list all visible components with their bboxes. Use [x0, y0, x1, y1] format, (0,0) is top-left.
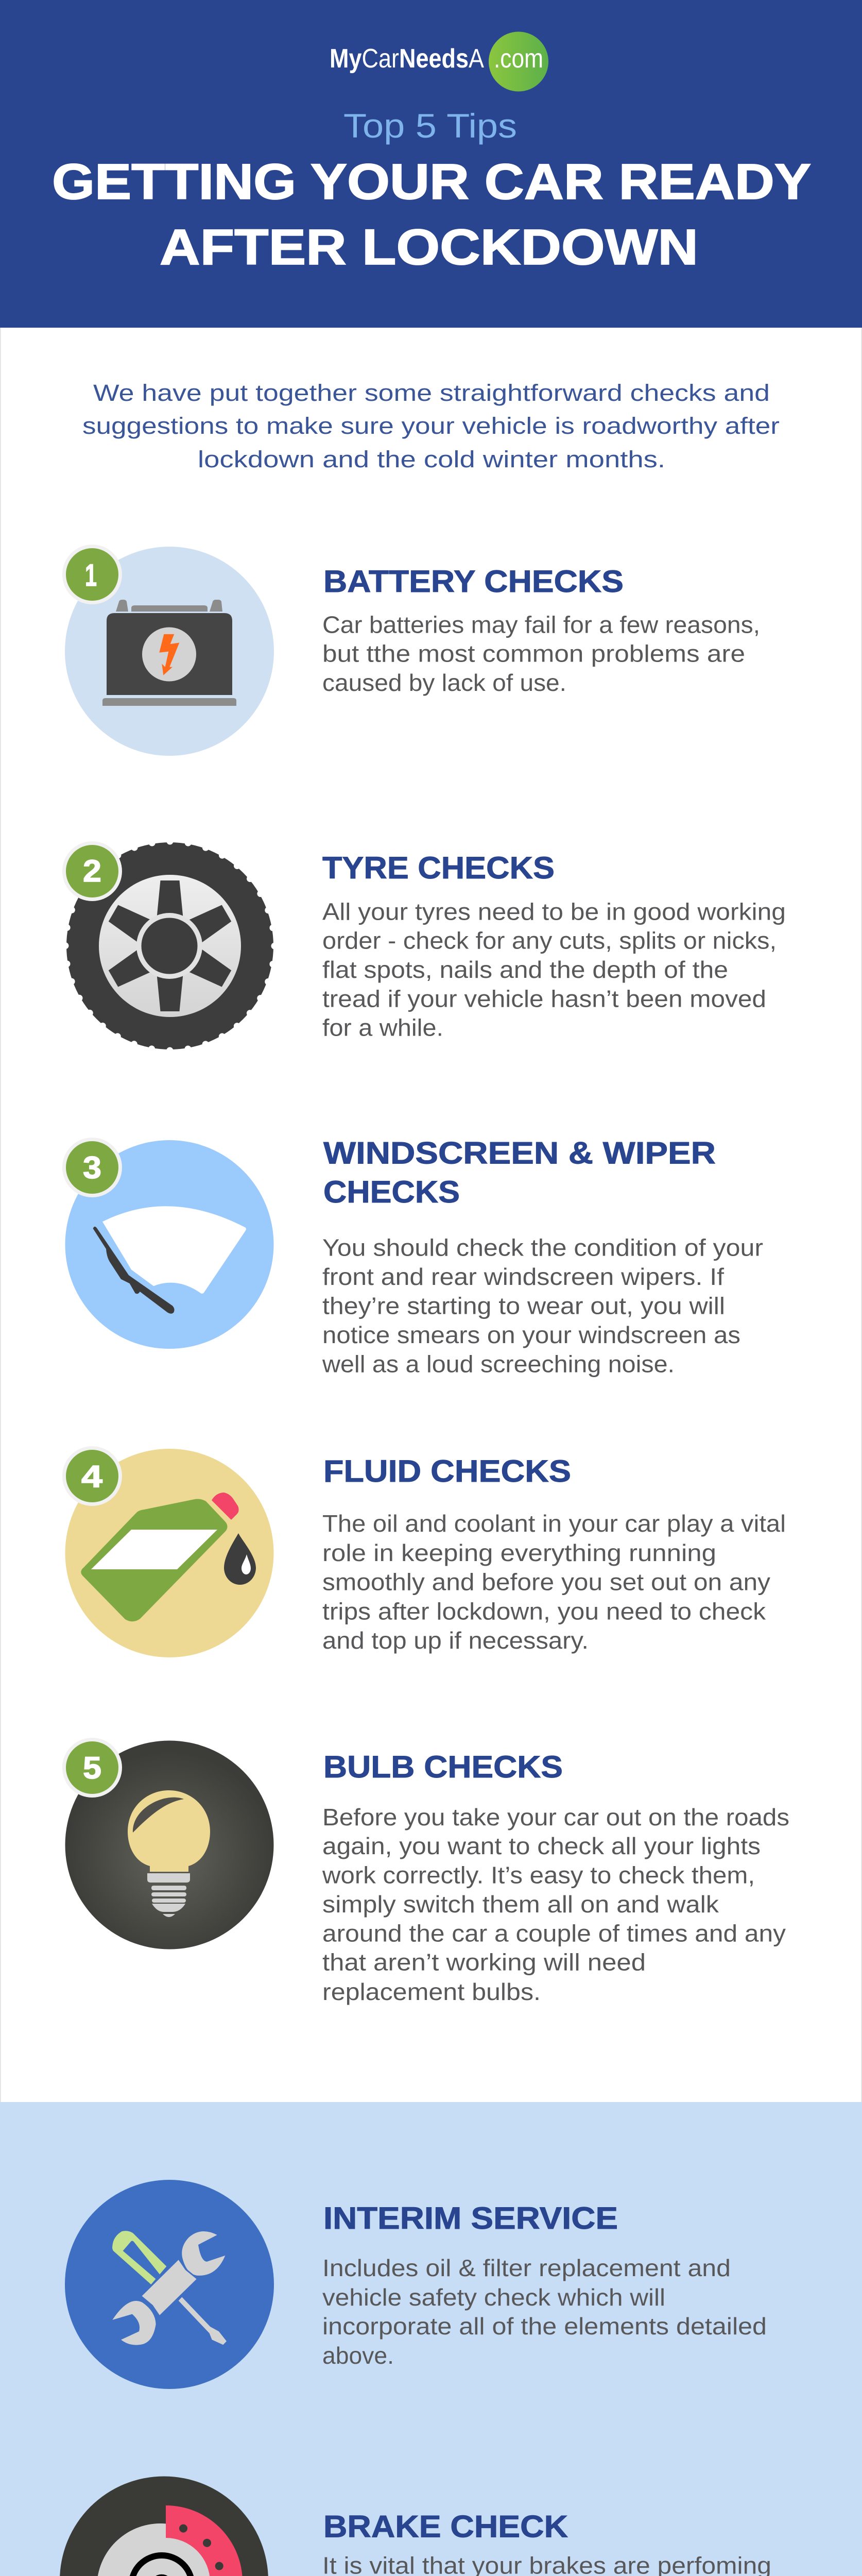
- heading: CHECKS: [323, 1175, 460, 1209]
- icon: windscreen wiper: [65, 1140, 274, 1349]
- body text: order - check for any cuts, splits or nicks,: [322, 927, 777, 954]
- heading: TYRE CHECKS: [322, 851, 555, 885]
- body text: flat spots, nails and the depth of the: [322, 956, 728, 983]
- panel: tyre check: [62, 841, 786, 1050]
- heading: INTERIM SERVICE: [323, 2201, 618, 2235]
- body text: and top up if necessary.: [322, 1627, 589, 1654]
- body text: Car batteries may fail for a few reasons,: [322, 612, 760, 638]
- logo: MyCarNeedsA: [330, 44, 484, 74]
- icon: tyre: [65, 841, 274, 1050]
- body text: [322, 612, 760, 696]
- intro text: lockdown and the cold winter months.: [198, 446, 665, 472]
- body text: but tthe most common problems are: [322, 640, 745, 667]
- body text: notice smears on your windscreen as: [322, 1321, 740, 1348]
- body text: Includes oil & filter replacement and: [322, 2255, 731, 2281]
- body text: smoothly and before you set out on any: [322, 1568, 770, 1595]
- body text: Before you take your car out on the roads: [322, 1804, 789, 1831]
- body text: [322, 898, 786, 1041]
- body text: caused by lack of use.: [322, 669, 566, 696]
- panel: windscreen and wiper check: [62, 1136, 763, 1378]
- number badge 4: 4: [81, 1459, 103, 1494]
- heading: BULB CHECKS: [323, 1750, 563, 1784]
- body text: All your tyres need to be in good working: [322, 898, 786, 925]
- number badge 4: [62, 1446, 122, 1506]
- body text: work correctly. It’s easy to check them,: [322, 1862, 755, 1889]
- body text: vehicle safety check which will: [322, 2284, 665, 2311]
- body text: [322, 2255, 767, 2369]
- subtitle: Top 5 Tips: [343, 107, 517, 145]
- number badge 1: [62, 545, 122, 604]
- body text: front and rear windscreen wipers. If: [322, 1263, 724, 1290]
- panel: header: [0, 0, 862, 328]
- icon: light bulb: [65, 1740, 274, 1950]
- body text: [322, 1804, 789, 2005]
- body text: trips after lockdown, you need to check: [322, 1598, 766, 1624]
- body text: replacement bulbs.: [322, 1978, 541, 2005]
- body text: [322, 1510, 786, 1654]
- icon: brake disc: [60, 2476, 268, 2576]
- body text: incorporate all of the elements detailed: [322, 2313, 767, 2340]
- heading: BRAKE CHECK: [323, 2509, 568, 2544]
- heading: [323, 1136, 716, 1209]
- panel: fluid check: [62, 1446, 786, 1657]
- body text: around the car a couple of times and any: [322, 1920, 786, 1947]
- body text: [322, 1234, 763, 1378]
- intro text: suggestions to make sure your vehicle is roadworthy after: [82, 413, 780, 439]
- intro text: We have put together some straightforward checks and: [93, 380, 770, 406]
- body text: You should check the condition of your: [322, 1234, 763, 1261]
- body text: role in keeping everything running: [322, 1539, 716, 1566]
- logo: [330, 32, 548, 92]
- number badge 2: 2: [83, 854, 101, 888]
- number badge 5: 5: [83, 1751, 101, 1785]
- heading: FLUID CHECKS: [323, 1454, 571, 1488]
- logo: .com: [494, 44, 543, 74]
- icon: spanner and screwdriver: [65, 2180, 274, 2389]
- panel: battery check: [62, 545, 760, 756]
- title: AFTER LOCKDOWN: [160, 219, 698, 275]
- number badge 1: 1: [85, 558, 97, 592]
- title: [52, 154, 811, 275]
- body text: again, you want to check all your lights: [322, 1833, 761, 1859]
- panel: services: [0, 2102, 862, 2576]
- heading: WINDSCREEN & WIPER: [323, 1136, 716, 1171]
- body text: that aren’t working will need: [322, 1949, 646, 1976]
- intro text: [82, 380, 780, 472]
- heading: BATTERY CHECKS: [323, 564, 624, 599]
- icon: fluid can and oil drop: [65, 1449, 274, 1657]
- body text: simply switch them all on and walk: [322, 1891, 719, 1918]
- body text: The oil and coolant in your car play a vital: [322, 1510, 786, 1537]
- number badge 2: [62, 841, 122, 901]
- number badge 5: [62, 1738, 122, 1798]
- panel: bulb check: [62, 1738, 789, 2005]
- body text: well as a loud screeching noise.: [322, 1351, 675, 1378]
- body text: tread if your vehicle hasn’t been moved: [322, 985, 766, 1012]
- title: GETTING YOUR CAR READY: [52, 154, 811, 210]
- number badge 3: [62, 1138, 122, 1197]
- icon: battery: [65, 547, 274, 756]
- number badge 3: 3: [83, 1150, 101, 1185]
- body text: they’re starting to wear out, you will: [322, 1292, 725, 1319]
- body text: above.: [322, 2342, 394, 2369]
- body text: for a while.: [322, 1014, 443, 1041]
